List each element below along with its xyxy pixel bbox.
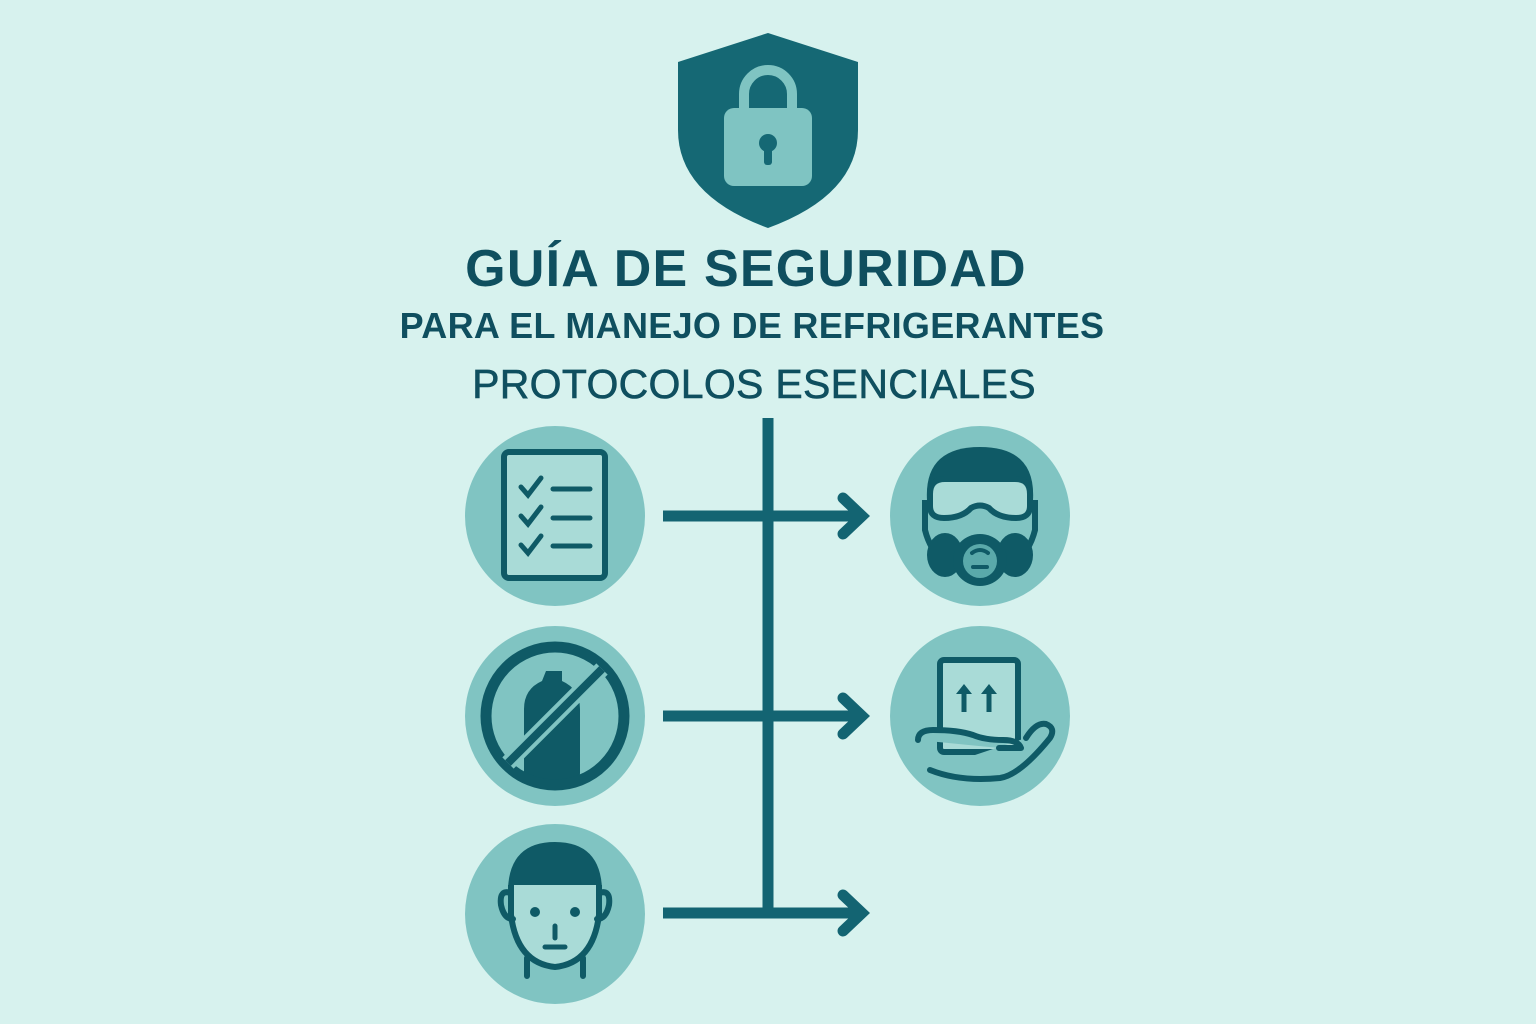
icon: person face (465, 824, 645, 1004)
subtitle: PARA EL MANEJO DE REFRIGERANTES (400, 305, 1104, 346)
connector: vertical line and arrows (663, 418, 862, 931)
icon: prohibited cylinder (465, 626, 645, 806)
section heading: PROTOCOLOS ESENCIALES (472, 361, 1036, 407)
icon: checklist (465, 426, 645, 606)
title: GUÍA DE SEGURIDAD (465, 240, 1027, 298)
icon: hand holding box (890, 626, 1070, 806)
icon: shield with lock (678, 33, 858, 228)
icon: respirator mask (890, 426, 1070, 606)
